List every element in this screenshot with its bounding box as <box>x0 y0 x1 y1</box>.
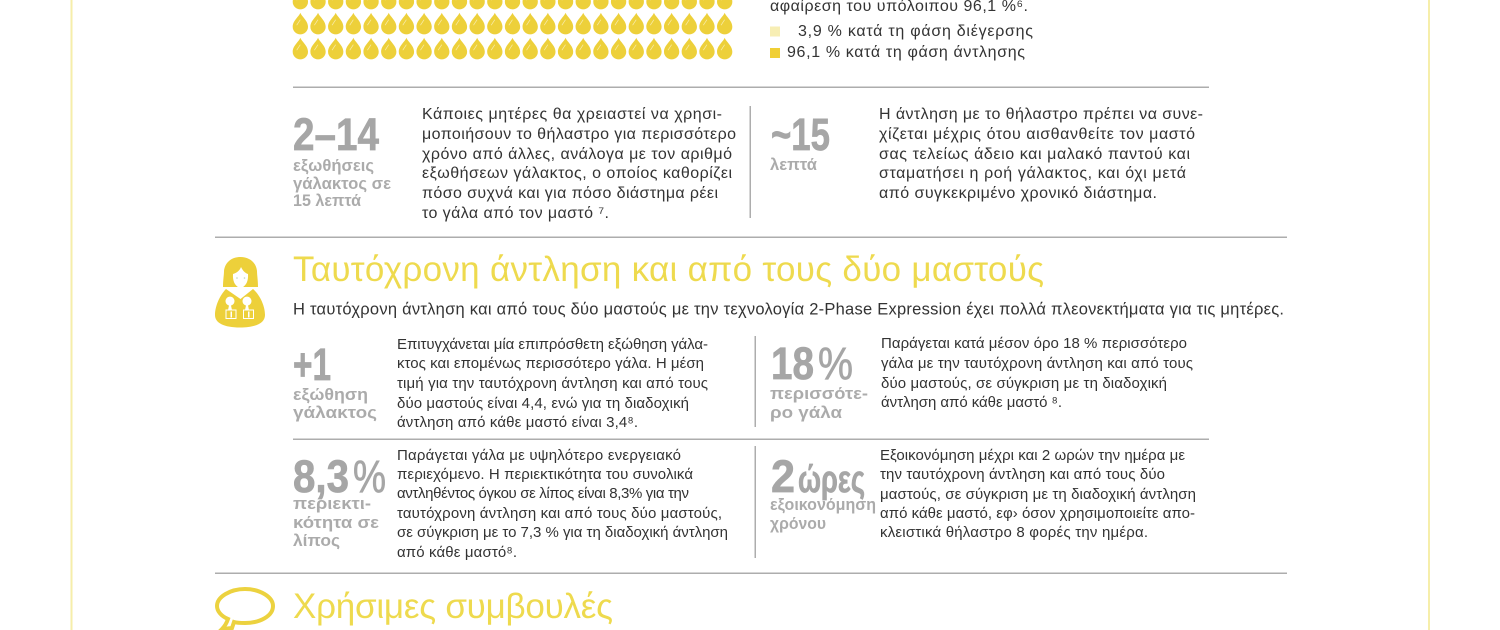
stat: 18% more milk: περισσότε- <box>770 384 868 403</box>
stat: 8.3% fat content: περιεκτι- <box>293 494 371 513</box>
text block: expression phase legend <box>770 0 1033 61</box>
stat: 8.3% fat content: % <box>353 451 386 502</box>
stat: 8.3% fat content: 8,3 <box>293 451 349 502</box>
heading: simultaneous pumping: Ταυτόχρονη άντληση και από τους δύο μαστούς <box>293 250 1044 289</box>
text block: time saving <box>880 447 1196 541</box>
text block: continue until breast is empty: σταματήσει η ροή γάλακτος, και όχι μετά <box>879 165 1186 182</box>
text block: 18 percent more milk: δύο μαστούς, σε σύγκριση με τη διαδοχική <box>881 375 1167 392</box>
stat: 2–14 expressions <box>293 109 391 210</box>
stat: 18% more milk: 18 <box>771 338 814 389</box>
text block: time saving: κλειστικά θήλαστρο 8 φορές την ημέρα. <box>880 524 1148 541</box>
text block: continue until breast is empty: χίζεται μέχρις ότου αισθανθείτε τον μαστό <box>879 126 1195 143</box>
stat: +1 expression: γάλακτος <box>293 403 377 422</box>
stat: 8.3% fat content <box>293 451 386 550</box>
stat: ~15 minutes <box>770 109 830 174</box>
heading: useful tips: Χρήσιμες συμβουλές <box>293 587 613 626</box>
stat: 2–14 expressions: 2–14 <box>293 109 379 160</box>
stat: +1 expression: εξώθηση <box>293 385 368 404</box>
text block: higher energy content: ταυτόχρονη άντληση και από τους δύο μαστούς, <box>397 505 722 522</box>
stat: 8.3% fat content: λίπος <box>293 531 340 550</box>
stat: 2–14 expressions: 15 λεπτά <box>293 191 362 210</box>
stat: 2 hours saved: χρόνου <box>770 514 826 533</box>
text block: pumping duration varies: χρόνο από άλλες, ανάλογα με τον αριθμό <box>422 146 732 163</box>
legend: expression phase: 96,1 % κατά τη φάση άντλησης <box>787 44 1025 61</box>
text block: pumping duration varies: πόσο συχνά και για πόσο διάστημα ρέει <box>422 185 718 202</box>
text block: continue until breast is empty: Η άντληση με το θήλαστρο πρέπει να συνε- <box>879 106 1203 123</box>
text block: time saving: την ταυτόχρονη άντληση και από τους δύο <box>880 466 1165 483</box>
text block: additional expression: τιμή για την ταυτόχρονη άντληση και από τους <box>397 375 708 392</box>
stat: ~15 minutes: ~15 <box>771 109 830 160</box>
text block: time saving: μαστούς, σε σύγκριση με τη διαδοχική άντληση <box>880 486 1196 503</box>
stat: 2 hours saved: εξοικονόμηση <box>770 495 876 514</box>
page frame left border <box>70 0 72 630</box>
icon: speech bubble <box>217 589 273 629</box>
text block: 18 percent more milk: άντληση από κάθε μαστό ⁸. <box>881 394 1062 411</box>
stat: 18% more milk <box>770 338 868 422</box>
text block: pumping duration varies: το γάλα από τον μαστό ⁷. <box>422 205 609 222</box>
text block: higher energy content: αντληθέντος όγκου σε λίπος είναι 8,3% για την <box>397 485 689 502</box>
stat: 2–14 expressions: γάλακτος σε <box>293 174 391 193</box>
stat: 2 hours saved: 2 <box>771 451 795 502</box>
text block: time saving: Εξοικονόμηση μέχρι και 2 ωρών την ημέρα με <box>880 447 1185 464</box>
intro sentence: Η ταυτόχρονη άντληση και από τους δύο μαστούς με την τεχνολογία 2-Phase Expression έχει πολλά πλεονεκτήματα για τις μητέρες. <box>293 300 1284 318</box>
text block: higher energy content <box>397 447 728 561</box>
text block: time saving: από κάθε μαστό, εφ› όσον χρησιμοποιείτε απο- <box>880 505 1195 522</box>
text block: continue until breast is empty <box>879 106 1203 202</box>
text block: higher energy content: Παράγεται γάλα με υψηλότερο ενεργειακό <box>397 447 681 464</box>
stat: ~15 minutes: λεπτά <box>770 155 818 174</box>
icon grid: milk drops <box>293 0 732 59</box>
text block: continue until breast is empty: σας τελείως άδειο και μαλακό παντού και <box>879 146 1190 163</box>
stat: 2–14 expressions: εξωθήσεις <box>293 156 374 175</box>
stat: 2 hours saved <box>770 451 876 533</box>
icon: mother with double pump <box>215 257 265 328</box>
page frame right border <box>1428 0 1430 630</box>
stat: +1 expression: +1 <box>293 339 331 390</box>
text block: additional expression <box>397 336 708 431</box>
text block: additional expression: δύο μαστούς είναι 4,4, ενώ για τη διαδοχική <box>397 395 689 412</box>
stat: 8.3% fat content: κότητα σε <box>293 513 379 532</box>
text block: 18 percent more milk: γάλα με την ταυτόχρονη άντληση και από τους <box>881 355 1193 372</box>
text block: pumping duration varies: Κάποιες μητέρες θα χρειαστεί να χρησι- <box>422 106 722 123</box>
stat: 18% more milk: ρο γάλα <box>770 403 843 422</box>
text block: 18 percent more milk: Παράγεται κατά μέσον όρο 18 % περισσότερο <box>881 335 1187 352</box>
stat: +1 expression <box>293 339 377 422</box>
legend: stimulation phase: 3,9 % κατά τη φάση διέγερσης <box>798 23 1033 40</box>
text block: continue until breast is empty: από συγκεκριμένο χρονικό διάστημα. <box>879 185 1157 202</box>
text block: additional expression: άντληση από κάθε μαστό είναι 3,4⁸. <box>397 414 638 431</box>
text block: pumping duration varies <box>422 106 736 222</box>
text block: higher energy content: σε σύγκριση με το 7,3 % για τη διαδοχική άντληση <box>397 524 728 541</box>
text block: higher energy content: περιεχόμενο. Η περιεκτικότητα του συνολικά <box>397 466 693 483</box>
stat: 18% more milk: % <box>818 338 853 389</box>
text block: pumping duration varies: μοποιήσουν το θήλαστρο για περισσότερο <box>422 126 736 143</box>
text block: additional expression: Επιτυγχάνεται μία επιπρόσθετη εξώθηση γάλα- <box>397 336 708 353</box>
text block: pumping duration varies: εξωθήσεων γάλακτος, ο οποίος καθορίζει <box>422 165 732 182</box>
text block: 18 percent more milk <box>881 335 1193 411</box>
stat: 2 hours saved: ώρες <box>798 459 865 501</box>
text block: higher energy content: από κάθε μαστό⁸. <box>397 544 517 561</box>
text block: additional expression: κτος και επομένως περισσότερο γάλα. Η μέση <box>397 355 704 372</box>
